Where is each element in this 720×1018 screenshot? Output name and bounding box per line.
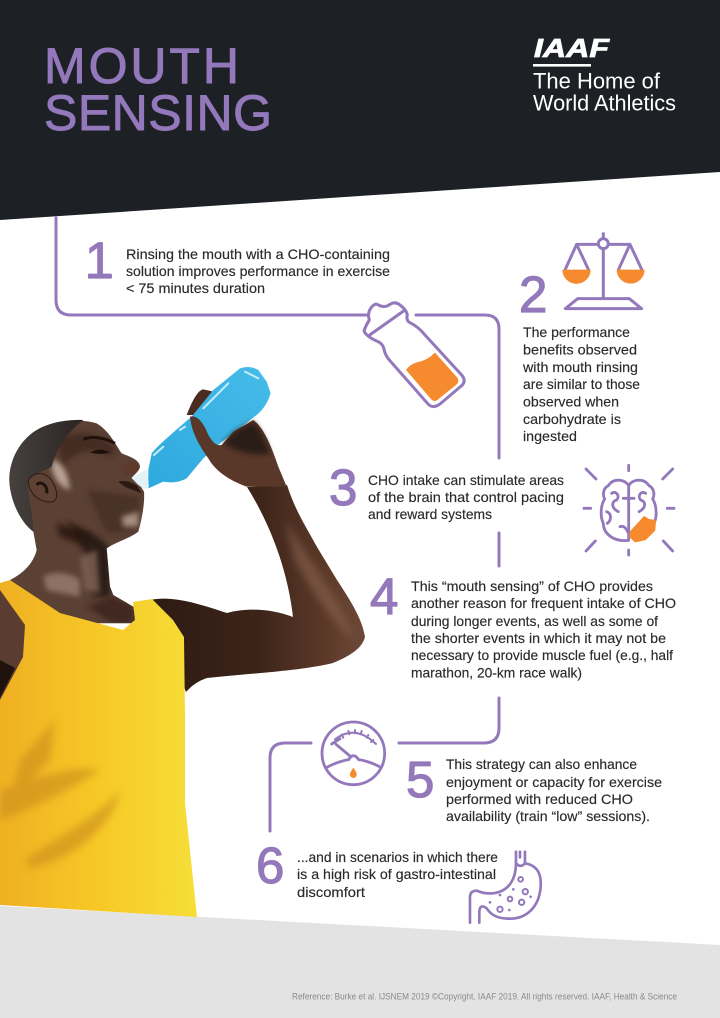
step 3: 3 — [329, 459, 357, 516]
logo: IAAF: World Athletics — [533, 90, 676, 116]
step 1: solution improves performance in exercise — [126, 264, 390, 279]
step 1: < 75 minutes duration — [126, 281, 265, 296]
step 2 — [519, 266, 640, 444]
step 4: necessary to provide muscle fuel (e.g., half — [411, 648, 673, 663]
step 1 — [85, 232, 390, 296]
hand shadow — [223, 422, 270, 455]
brow and eye — [83, 437, 115, 443]
tank top — [0, 580, 197, 917]
step 2: with mouth rinsing — [522, 360, 638, 375]
drinking hand and bottle — [132, 367, 287, 489]
logo: IAAF: IAAF — [534, 33, 610, 63]
header band — [0, 0, 720, 220]
lips — [118, 481, 142, 493]
title: SENSING — [44, 85, 272, 141]
step 2: ingested — [523, 429, 577, 444]
step 2: observed when — [523, 394, 619, 410]
logo: IAAF — [533, 33, 676, 116]
title: MOUTH — [44, 38, 239, 94]
hair — [9, 420, 83, 532]
logo: IAAF: The Home of — [533, 68, 661, 94]
icon: balance scale — [562, 232, 645, 309]
ear — [28, 473, 57, 502]
step 4: the shorter events in which it may not be — [411, 631, 666, 646]
arm highlight — [285, 520, 355, 640]
step 4: during longer events, as well as some of — [411, 614, 658, 629]
icon: brain — [584, 465, 674, 555]
step 4: marathon, 20-km race walk) — [411, 666, 582, 680]
step 5: performed with reduced CHO — [446, 792, 633, 807]
reference note: Reference: Burke et al. IJSNEM 2019 ©Copyright. IAAF 2019. All rights reserved. IAAF, Health & Science — [292, 992, 677, 1002]
shirt folds — [0, 720, 120, 868]
step 4 — [370, 568, 676, 680]
step 5: enjoyment or capacity for exercise — [446, 775, 662, 790]
step 1: Rinsing the mouth with a CHO-containing — [126, 247, 390, 262]
step 6: 6 — [256, 837, 284, 894]
face shading — [67, 520, 110, 597]
step 2: carbohydrate is — [523, 412, 621, 427]
skin under armhole — [0, 590, 25, 700]
title — [44, 38, 272, 141]
step 5 — [406, 751, 662, 824]
step 4: This “mouth sensing” of CHO provides — [411, 579, 653, 594]
dark torso shadow — [0, 660, 15, 698]
connector line: bottom — [270, 698, 499, 831]
step 6: discomfort — [297, 885, 365, 900]
step 4: another reason for frequent intake of CHO — [411, 596, 676, 611]
fingers behind bottle — [187, 389, 213, 415]
hand — [190, 416, 287, 487]
bottle neck — [132, 469, 149, 489]
bottle — [148, 367, 271, 488]
step 2: are similar to those — [523, 377, 640, 392]
head and neck — [9, 420, 144, 623]
step 2: benefits observed — [523, 342, 637, 358]
footer band — [0, 906, 720, 1018]
step 3: of the brain that control pacing — [368, 490, 564, 505]
icon: sports bottle — [364, 303, 464, 407]
photo: athlete drinking — [0, 367, 365, 917]
step 3: CHO intake can stimulate areas — [368, 473, 564, 488]
step 6: is a high risk of gastro-intestinal — [297, 867, 496, 882]
bottle highlights — [154, 372, 258, 455]
raised arm — [150, 485, 365, 692]
step 2: 2 — [519, 266, 547, 323]
step 5: This strategy can also enhance — [446, 757, 637, 772]
icon: gauge with drop — [322, 722, 385, 785]
connector line: middle — [498, 533, 500, 566]
step 3: and reward systems — [368, 507, 492, 522]
step 3 — [329, 459, 564, 522]
connector line: top — [56, 218, 499, 458]
step 6: ...and in scenarios in which there — [297, 850, 498, 865]
step 5: availability (train “low” sessions). — [446, 809, 650, 824]
step 6 — [256, 837, 498, 900]
step 5: 5 — [406, 751, 434, 808]
nose — [119, 462, 140, 475]
step 4: 4 — [370, 568, 398, 625]
icon: stomach — [470, 852, 541, 923]
step 1: 1 — [85, 232, 113, 289]
step 2: The performance — [523, 325, 630, 340]
